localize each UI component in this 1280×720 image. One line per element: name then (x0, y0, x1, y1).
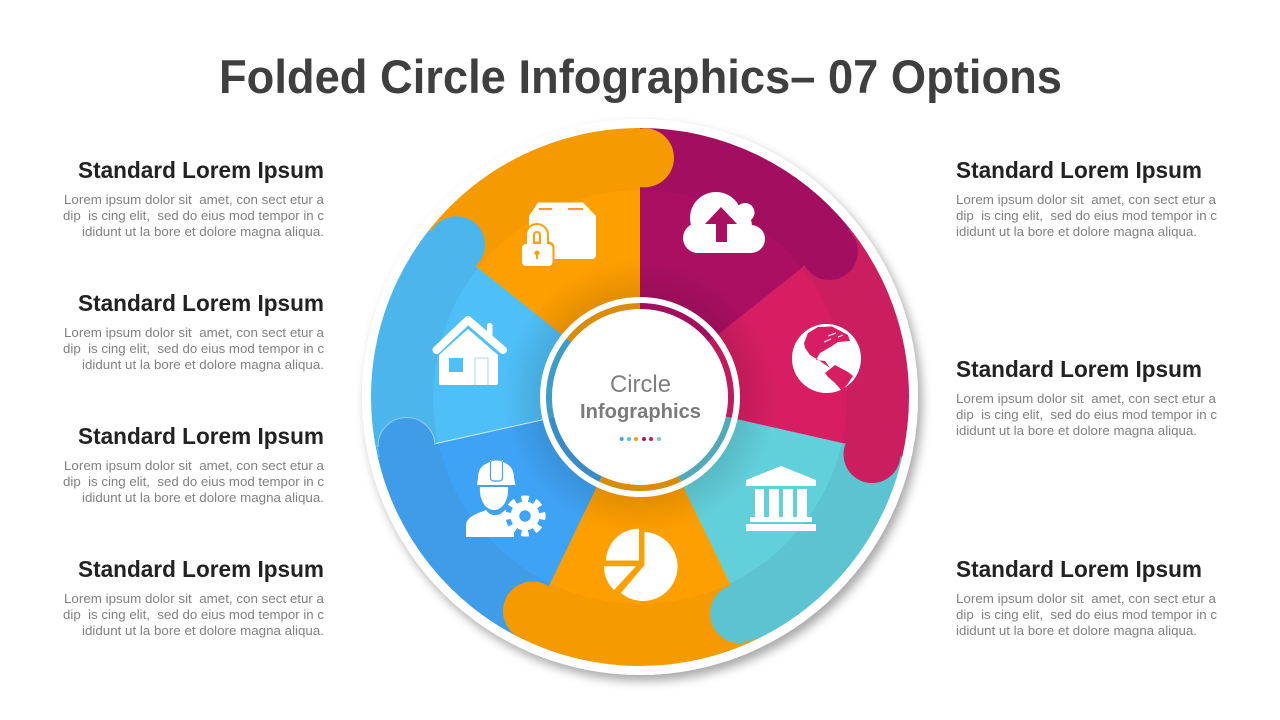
text block: right 2: Standard Lorem Ipsum (956, 356, 1202, 382)
hub colored ring (549, 306, 731, 488)
text block: left 1 (63, 157, 325, 239)
right text blocks (956, 157, 1218, 638)
title: Folded Circle Infographics– 07 Options (219, 50, 1062, 103)
text block: left 4 (63, 556, 325, 638)
inner lighter wedges (433, 190, 847, 604)
text block: right 3 (956, 556, 1218, 638)
text block: right 2: Lorem ipsum dolor sit amet, con sect etur a (956, 391, 1217, 406)
center hub (540, 297, 740, 497)
icon: house (436, 320, 503, 385)
icon: pie chart (604, 529, 678, 601)
text block: left 3: Lorem ipsum dolor sit amet, con sect etur a (64, 458, 325, 473)
text block: left 3: Standard Lorem Ipsum (78, 423, 324, 449)
hub label (580, 371, 701, 423)
text block: right 1: ididunt ut la bore et dolore magna aliqua. (956, 224, 1197, 239)
hub white disc (540, 297, 740, 497)
icon: engineer with gear (466, 460, 544, 537)
hub label: Infographics (580, 400, 701, 423)
text block: left 1: dip is cing elit, sed do eius mod tempor in c (63, 208, 325, 223)
text block: left 4: dip is cing elit, sed do eius mod tempor in c (63, 607, 325, 622)
text block: right 3: dip is cing elit, sed do eius mod tempor in c (956, 607, 1218, 622)
outer band segments (371, 128, 909, 666)
rounded fold caps (378, 128, 900, 643)
text block: right 1: Lorem ipsum dolor sit amet, con sect etur a (956, 192, 1217, 207)
folded circle diagram (362, 119, 918, 675)
white backing disc (362, 119, 918, 675)
text block: left 3: ididunt ut la bore et dolore magna aliqua. (82, 490, 324, 505)
text block: right 3: ididunt ut la bore et dolore magna aliqua. (956, 623, 1197, 638)
icon: box with padlock (520, 202, 596, 268)
text block: right 2: dip is cing elit, sed do eius mod tempor in c (956, 407, 1218, 422)
text block: left 3 (63, 423, 325, 505)
text block: left 2: dip is cing elit, sed do eius mod tempor in c (63, 341, 325, 356)
icon: bank building (746, 466, 816, 531)
hub dots (620, 437, 661, 441)
seam line between blue wedges (436, 419, 546, 444)
icon: cloud upload (683, 192, 765, 253)
hub label: Circle (610, 371, 671, 398)
text block: right 1: Standard Lorem Ipsum (956, 157, 1202, 183)
text block: right 2: ididunt ut la bore et dolore magna aliqua. (956, 423, 1197, 438)
text block: right 3: Lorem ipsum dolor sit amet, con sect etur a (956, 591, 1217, 606)
text block: left 2: ididunt ut la bore et dolore magna aliqua. (82, 357, 324, 372)
text block: left 1: Lorem ipsum dolor sit amet, con sect etur a (64, 192, 325, 207)
text block: left 4: Lorem ipsum dolor sit amet, con sect etur a (64, 591, 325, 606)
text block: left 4: ididunt ut la bore et dolore magna aliqua. (82, 623, 324, 638)
icon: globe (792, 324, 861, 393)
text block: right 2 (956, 356, 1218, 438)
text block: left 2 (63, 290, 325, 372)
text block: left 3: dip is cing elit, sed do eius mod tempor in c (63, 474, 325, 489)
text block: left 1: Standard Lorem Ipsum (78, 157, 324, 183)
text block: right 3: Standard Lorem Ipsum (956, 556, 1202, 582)
text block: left 1: ididunt ut la bore et dolore magna aliqua. (82, 224, 324, 239)
inner shading around hub (502, 259, 778, 535)
text block: right 1: dip is cing elit, sed do eius mod tempor in c (956, 208, 1218, 223)
left text blocks (63, 157, 325, 638)
text block: left 4: Standard Lorem Ipsum (78, 556, 324, 582)
text block: right 1 (956, 157, 1218, 239)
text block: left 2: Lorem ipsum dolor sit amet, con sect etur a (64, 325, 325, 340)
text block: left 2: Standard Lorem Ipsum (78, 290, 324, 316)
